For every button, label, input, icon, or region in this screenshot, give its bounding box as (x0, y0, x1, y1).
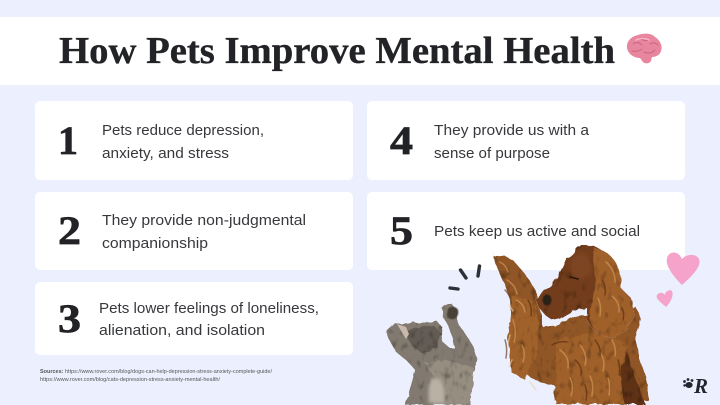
text: card 3: Pets lower feelings of loneliness, (99, 300, 319, 317)
text: card 2: companionship (102, 235, 208, 252)
dog body and raised leg (492, 249, 649, 404)
icon: paw (683, 378, 693, 388)
dog curls (500, 262, 624, 400)
text: card 3 (99, 300, 319, 339)
sources: https://www.rover.com/blog/cats-depression-stress-anxiety-mental-health/ (40, 377, 221, 383)
logo (683, 374, 708, 398)
number 4: 4 (390, 118, 413, 163)
dog face details (542, 253, 592, 306)
cat paw pads (447, 307, 458, 319)
title band (0, 17, 720, 85)
text: card 5: Pets keep us active and social (434, 223, 640, 240)
text: card 1: anxiety, and stress (102, 145, 229, 162)
icon: large heart (667, 252, 699, 285)
panel: card 2 (35, 192, 353, 270)
cat chest highlight (428, 378, 444, 403)
panel: card 1 (35, 101, 353, 180)
panel: card 5 (367, 192, 685, 270)
panel: card 4 (367, 101, 685, 180)
sources (40, 369, 273, 383)
text: card 2 (102, 212, 306, 252)
text: card 3: alienation, and isolation (99, 322, 265, 339)
text: card 4: sense of purpose (434, 145, 550, 162)
text: card 4 (434, 122, 590, 162)
icon: high-five motion marks (450, 266, 480, 289)
sources: Sources: https://www.rover.com/blog/dogs-can-help-depression-stress-anxiety-complete-guide/ (40, 369, 273, 375)
number 1: 1 (58, 118, 78, 163)
number 2: 2 (58, 208, 81, 253)
dog head and ear (536, 245, 634, 338)
text: card 1 (102, 122, 264, 162)
icon: dog (492, 245, 649, 404)
cat ear (397, 324, 409, 339)
number 5: 5 (390, 208, 413, 253)
text: card 1: Pets reduce depression, (102, 122, 264, 139)
icon: brain (627, 34, 662, 63)
title: How Pets Improve Mental Health (59, 30, 615, 72)
number 3: 3 (58, 296, 81, 341)
panel: card 3 (35, 282, 353, 355)
text: card 4: They provide us with a (434, 122, 590, 139)
text: card 2: They provide non-judgmental (102, 212, 306, 229)
icon: cat (386, 304, 477, 405)
logo letter: R (693, 374, 708, 398)
icon: small heart (657, 290, 673, 307)
